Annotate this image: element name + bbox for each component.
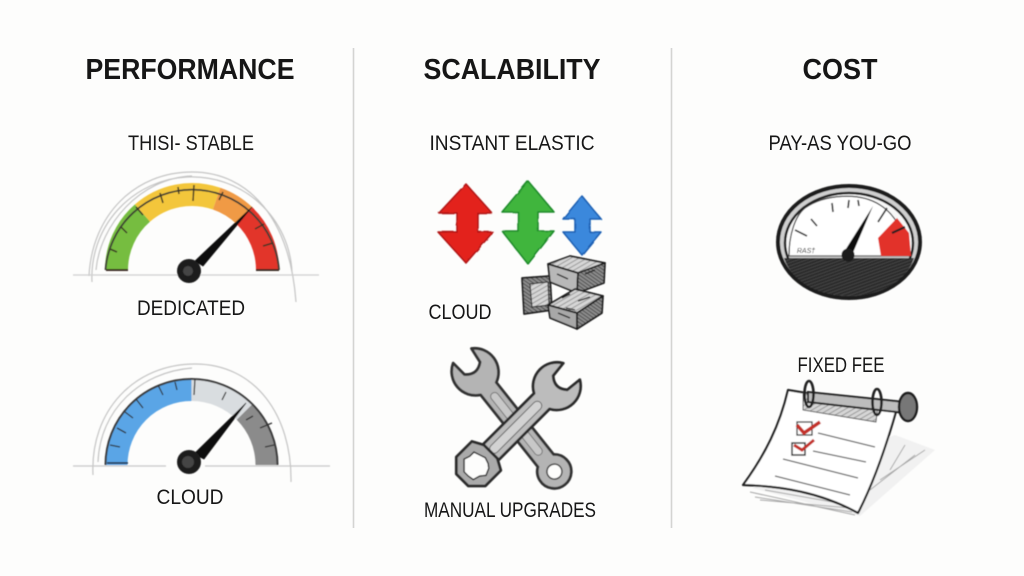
heading: scalability: SCALABILITY	[424, 54, 600, 86]
panel: performance	[73, 54, 330, 509]
chart: pay-as-you-go cost gauge	[778, 186, 920, 298]
chart: dedicated speed gauge	[73, 172, 319, 302]
label: this stable: THISI- STABLE	[128, 132, 254, 155]
heading: performance: PERFORMANCE	[86, 54, 294, 86]
icon: blue scaling arrow	[563, 196, 601, 255]
icon: stacked boxes	[522, 256, 605, 329]
panel: cost	[743, 54, 935, 516]
icon: green scaling arrow	[502, 181, 554, 264]
heading: cost: COST	[802, 54, 878, 86]
wrench: open and ring end	[444, 341, 583, 499]
label: fixed fee: FIXED FEE	[798, 354, 884, 377]
label: cloud performance: CLOUD	[156, 486, 224, 509]
panel: scalability	[424, 54, 605, 522]
icon: red scaling arrow	[438, 184, 493, 263]
label: instant elastic: INSTANT ELASTIC	[430, 132, 594, 155]
label: manual upgrades: MANUAL UPGRADES	[424, 499, 596, 522]
label: cloud scalability: CLOUD	[428, 301, 492, 324]
icon: crossed wrenches	[444, 341, 588, 499]
chart: cloud speed gauge	[73, 364, 330, 482]
label: dedicated: DEDICATED	[137, 297, 245, 320]
icon: fixed fee calendar checklist	[743, 381, 935, 516]
wrench: open and octagon end	[446, 355, 588, 497]
label: pay as you go: PAY-AS YOU-GO	[768, 132, 912, 155]
gauge scale label: RAS†	[797, 248, 815, 255]
